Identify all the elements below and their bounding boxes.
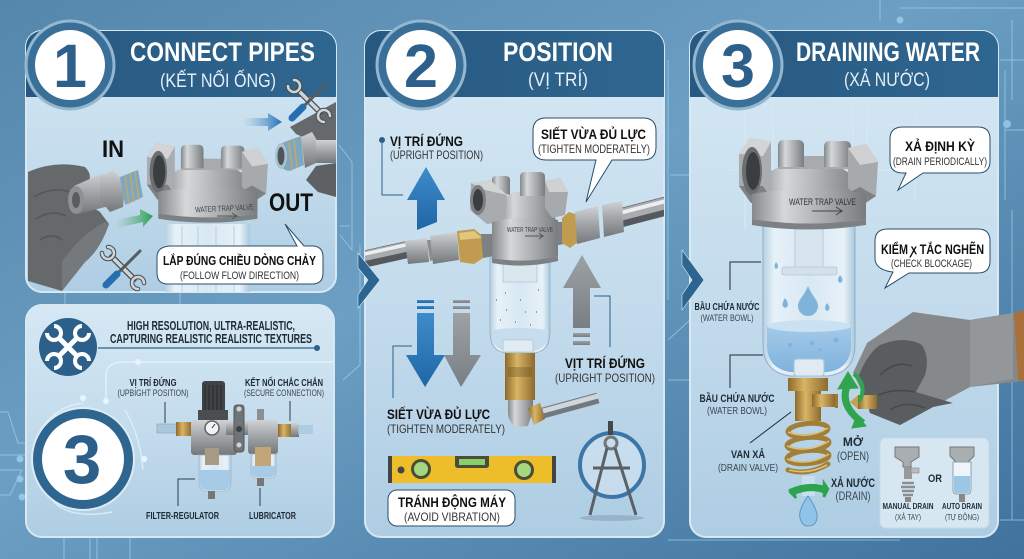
left fitting [68, 170, 143, 214]
badge 1: 1 [53, 32, 87, 100]
label upright right [555, 354, 655, 385]
label drain valve: (DRAIN VALVE) [718, 462, 778, 474]
callout flow direction [157, 224, 323, 284]
heading text [110, 319, 312, 346]
brass knob [850, 395, 877, 409]
title 2 [503, 37, 613, 91]
valve label: WATER TRAP VALVE [195, 202, 254, 215]
title 1 [130, 37, 315, 92]
label drain: (DRAIN) [836, 489, 871, 503]
inset labels [882, 502, 982, 522]
heading text: HIGH RESOLUTION, ULTRA-REALISTIC, [127, 319, 295, 333]
valve head [470, 172, 568, 266]
callout check blockage [875, 229, 990, 288]
bowl [490, 258, 550, 353]
callout drain periodically: XẢ ĐỊNH KỲ [905, 137, 976, 154]
callout check blockage: KIỂM ꭗ TẮC NGHẼN [881, 242, 984, 258]
inset manual or auto drain [880, 438, 989, 528]
label water bowl lower: BẦU CHỨA NƯỚC [700, 392, 775, 405]
compass icon [580, 421, 644, 521]
right fitting [275, 132, 336, 171]
label lubricator: LUBRICATOR [249, 510, 296, 522]
or: OR [928, 473, 942, 485]
blue arrow [243, 113, 282, 131]
valve label 2: WATER TRAP VALVE [507, 227, 553, 234]
label IN: IN [102, 136, 124, 163]
panel: filter regulator [26, 305, 334, 537]
callout flow direction: (FOLLOW FLOW DIRECTION) [180, 270, 299, 282]
right hand glove [290, 102, 336, 197]
label upright right: (UPRIGHT POSITION) [555, 371, 655, 385]
clear bowl [165, 224, 250, 294]
inset labels: MANUAL DRAIN [882, 502, 934, 511]
label water bowl lower: (WATER BOWL) [707, 406, 767, 417]
labels upper: KẾT NỐI CHẮC CHẮN [245, 375, 323, 389]
label drain: XẢ NƯỚC [831, 475, 875, 490]
lubricator unit [248, 409, 313, 486]
tools icon top [288, 80, 330, 122]
heading rule [98, 345, 320, 351]
manual drain icon [895, 447, 919, 502]
blue down arrow [406, 300, 445, 387]
valve label 3 [789, 197, 856, 215]
labels upper: (SECURE CONNECTION) [244, 388, 324, 399]
label tighten: (TIGHTEN MODERATELY) [387, 422, 505, 436]
valve head [147, 143, 268, 223]
water bowl [763, 222, 855, 376]
callout check blockage: (CHECK BLOCKAGE) [891, 258, 972, 270]
label drain [831, 475, 875, 503]
glow lines [40, 360, 334, 514]
labels upper [118, 375, 324, 399]
badge 2: 2 [404, 32, 438, 100]
label tighten: SIẾT VỪA ĐỦ LỰC [387, 405, 490, 422]
badge 3 small: 3 [63, 421, 101, 498]
main pipe left [360, 244, 410, 260]
badge 3 small [31, 407, 135, 511]
green drain arrow [790, 483, 828, 498]
gray up arrow [563, 255, 601, 345]
green rotate arrow [838, 372, 866, 428]
leader lines [165, 401, 290, 506]
callout flow direction: LẮP ĐÚNG CHIỀU DÒNG CHẢY [163, 253, 316, 268]
drain drop [800, 476, 817, 526]
auto drain icon [950, 447, 974, 502]
main pipe right [620, 200, 670, 218]
spirit level [388, 456, 556, 483]
inset labels: (XẢ TAY) [895, 513, 921, 522]
bracket [234, 405, 244, 452]
left hand glove [28, 164, 109, 291]
badge 1 [26, 21, 114, 109]
header bar 3 [690, 31, 998, 97]
label water bowl top [694, 300, 760, 324]
label upright: (UPRIGHT POSITION) [390, 148, 483, 162]
leader lines 2 [393, 296, 610, 398]
brass coil [787, 422, 829, 472]
drain valve [788, 378, 838, 421]
callout tighten: (TIGHTEN MODERATELY) [538, 142, 650, 156]
badge 2 [377, 21, 465, 109]
label drain valve [718, 448, 778, 474]
label drain valve: VAN XẢ [731, 448, 765, 461]
header bar 1 [26, 31, 336, 97]
leader lines 3 [730, 262, 791, 443]
filter-regulator unit [157, 381, 252, 499]
title 2: POSITION [503, 37, 613, 67]
callout avoid vibration: (AVOID VIBRATION) [404, 510, 500, 524]
grid lines [730, 107, 990, 230]
brass fitting [505, 353, 545, 427]
label upright: VỊ TRÍ ĐỨNG [390, 132, 463, 149]
valve label 3: WATER TRAP VALVE [789, 197, 856, 207]
label OUT: OUT [269, 189, 313, 217]
panel: draining water [690, 21, 1024, 537]
title 3 [796, 37, 980, 91]
callout drain periodically [890, 127, 990, 190]
labels upper: VỊ TRÍ ĐỨNG [130, 376, 176, 389]
panel: position [360, 21, 670, 537]
arrow chevron 2 [682, 250, 704, 310]
label filter-regulator: FILTER-REGULATOR [146, 510, 219, 522]
labels upper: (UPBIGHT POSITION) [118, 388, 188, 399]
valve label 2 [507, 227, 553, 239]
panel: connect pipes [26, 21, 336, 294]
label water bowl top: BẦU CHỨA NƯỚC [694, 300, 760, 313]
label tighten [387, 405, 505, 436]
callout avoid vibration: TRÁNH ĐỘNG MÁY [398, 493, 507, 510]
label water bowl top: (WATER BOWL) [700, 313, 754, 324]
valve label [195, 202, 254, 219]
green arrow [118, 209, 153, 228]
label open [837, 434, 869, 463]
title 1: (KẾT NỐI ỐNG) [160, 70, 276, 92]
title 3: (XẢ NƯỚC) [844, 69, 930, 91]
callout tighten: SIẾT VỪA ĐỦ LỰC [541, 125, 646, 142]
blue up arrow [407, 167, 445, 230]
label water bowl lower [700, 392, 775, 417]
label upright [379, 132, 483, 195]
droplets [774, 262, 842, 352]
callout tighten [533, 118, 656, 202]
callout drain periodically: (DRAIN PERIODICALLY) [893, 156, 987, 168]
tools icon bottom [102, 247, 144, 289]
callout avoid vibration [388, 490, 515, 526]
label open: MỞ [843, 434, 864, 449]
label open: (OPEN) [837, 449, 869, 463]
badge 3 [694, 21, 782, 109]
heading text: CAPTURING REALISTIC REALISTIC TEXTURES [110, 332, 312, 346]
valve head [739, 138, 878, 230]
label upright right: VỊT TRÍ ĐỨNG [565, 354, 645, 371]
elbow pipe [543, 396, 598, 413]
pipe fittings [405, 201, 624, 264]
gray down arrow [444, 300, 481, 387]
title 1: CONNECT PIPES [130, 37, 315, 67]
wrench icon [39, 318, 97, 376]
badge 3: 3 [721, 32, 755, 100]
inset labels: (TỰ ĐỘNG) [945, 513, 979, 522]
title 2: (VỊ TRÍ) [528, 70, 588, 91]
inset labels: AUTO DRAIN [942, 502, 982, 511]
header bar 2 [365, 31, 664, 97]
arrow chevron 1 [358, 253, 380, 308]
hand glove [853, 310, 1024, 425]
